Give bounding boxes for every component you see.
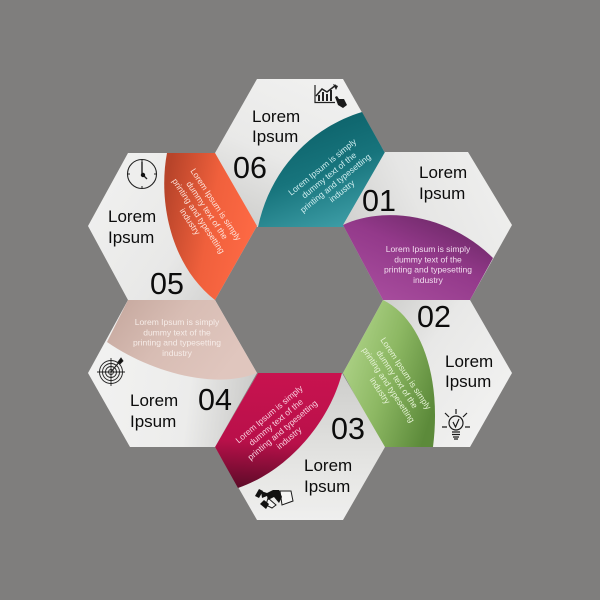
number 05: 05 bbox=[150, 267, 184, 301]
body text 03: industry bbox=[274, 424, 304, 451]
body text 02: printing and typesetting bbox=[360, 346, 417, 425]
number 01: 01 bbox=[362, 184, 396, 218]
body text 03: Lorem Ipsum is simply bbox=[233, 383, 305, 445]
heading 03: Ipsum bbox=[304, 477, 350, 496]
heading 02: Lorem bbox=[445, 352, 493, 371]
body text 04: printing and typesetting bbox=[133, 338, 221, 348]
teal curved band bbox=[258, 112, 385, 227]
body text 02: dummy text of the bbox=[374, 348, 420, 410]
body text 06: industry bbox=[327, 177, 357, 204]
body text 02: industry bbox=[368, 375, 393, 406]
heading 04: Lorem bbox=[130, 391, 178, 410]
crimson curved band bbox=[215, 373, 342, 488]
body text 06: printing and typesetting bbox=[298, 151, 373, 215]
heading 05: Lorem bbox=[108, 207, 156, 226]
hexagon 03 base bbox=[215, 373, 385, 520]
panel: hexagon 01 bbox=[343, 152, 512, 300]
hexagon 04 base bbox=[88, 300, 257, 447]
icon: target with dart bbox=[97, 358, 125, 386]
green curved band bbox=[343, 300, 435, 447]
body text 01: printing and typesetting bbox=[384, 265, 472, 275]
hexagon 01 base bbox=[343, 152, 512, 300]
heading 02: Ipsum bbox=[445, 372, 491, 391]
icon: chart with hand bbox=[315, 84, 347, 108]
body text 01: industry bbox=[413, 275, 444, 285]
heading 05: Ipsum bbox=[108, 228, 154, 247]
heading 01: Ipsum bbox=[419, 184, 465, 203]
number 04: 04 bbox=[198, 383, 232, 417]
orange curved band bbox=[164, 153, 257, 300]
panel: hexagon 06 bbox=[215, 79, 385, 227]
panel: hexagon 02 bbox=[343, 300, 512, 447]
purple curved band bbox=[343, 215, 493, 300]
body text 06: Lorem Ipsum is simply bbox=[286, 136, 359, 197]
heading 06: Lorem bbox=[252, 107, 300, 126]
icon: light bulb bbox=[442, 409, 470, 439]
body text 05: Lorem Ipsum is simply bbox=[188, 166, 244, 243]
body text 02: Lorem Ipsum is simply bbox=[378, 335, 434, 412]
number 06: 06 bbox=[233, 151, 267, 185]
body text 04: industry bbox=[162, 348, 193, 358]
heading 01: Lorem bbox=[419, 163, 467, 182]
icon: clock bbox=[128, 160, 156, 188]
panel: hexagon 05 bbox=[88, 153, 257, 301]
body text 04: dummy text of the bbox=[143, 327, 211, 337]
hexagon 05 base bbox=[88, 153, 257, 300]
number 02: 02 bbox=[417, 300, 451, 334]
panel: hexagon 03 bbox=[215, 373, 385, 520]
hexagon 06 base bbox=[215, 79, 385, 227]
body text 03: dummy text of the bbox=[247, 396, 305, 448]
heading 06: Ipsum bbox=[252, 127, 298, 146]
icon: handshake bbox=[255, 489, 293, 509]
pink curved band bbox=[107, 300, 257, 380]
body text 05: printing and typesetting bbox=[170, 177, 227, 256]
body text 01: Lorem Ipsum is simply bbox=[386, 244, 470, 254]
body text 01: dummy text of the bbox=[394, 254, 462, 264]
body text 04: Lorem Ipsum is simply bbox=[135, 317, 219, 327]
body text 05: dummy text of the bbox=[184, 179, 230, 241]
body text 06: dummy text of the bbox=[299, 150, 358, 200]
body text 05: industry bbox=[178, 206, 203, 237]
heading 03: Lorem bbox=[304, 456, 352, 475]
panel: hexagon 04 bbox=[88, 300, 257, 447]
body text 03: printing and typesetting bbox=[246, 398, 319, 462]
heading 04: Ipsum bbox=[130, 412, 176, 431]
number 03: 03 bbox=[331, 412, 365, 446]
hexagon 02 base bbox=[343, 300, 512, 447]
